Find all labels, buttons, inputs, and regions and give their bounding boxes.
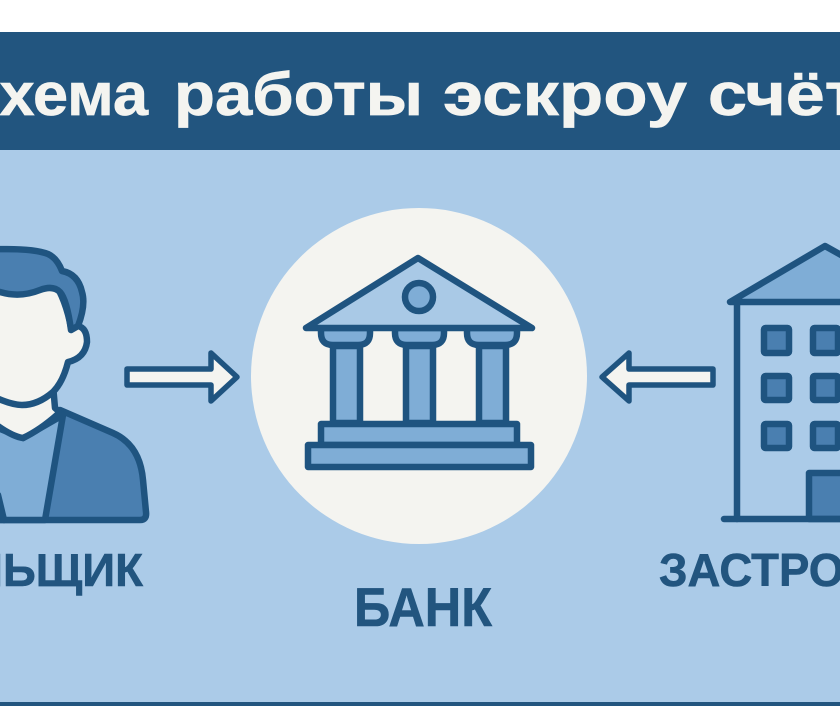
shirt xyxy=(0,415,63,520)
hair xyxy=(0,249,83,330)
neck xyxy=(0,385,59,438)
lapel line xyxy=(0,495,4,520)
icon: bank building xyxy=(306,258,532,467)
columns xyxy=(333,346,360,423)
door xyxy=(809,473,840,519)
pediment medallion xyxy=(405,283,433,311)
title banner xyxy=(0,32,840,150)
panel: light blue background xyxy=(0,150,840,702)
ground line xyxy=(724,516,840,522)
icon: developer building xyxy=(724,246,840,519)
pediment xyxy=(306,258,532,328)
roof xyxy=(730,246,840,302)
title: работы xyxy=(174,61,423,128)
windows xyxy=(764,328,838,448)
steps xyxy=(321,424,517,445)
arrow: buyer to bank xyxy=(127,353,237,401)
wall xyxy=(734,302,740,519)
bank circle xyxy=(251,208,587,544)
bottom rule xyxy=(0,702,840,706)
capitals xyxy=(321,328,370,345)
jacket xyxy=(0,410,146,520)
title xyxy=(0,61,840,128)
title: эскроу xyxy=(443,61,688,128)
face xyxy=(0,280,87,405)
arrow: developer to bank xyxy=(602,353,713,401)
icon: person (buyer) xyxy=(0,249,146,520)
label: bank: БАНК xyxy=(354,576,492,638)
